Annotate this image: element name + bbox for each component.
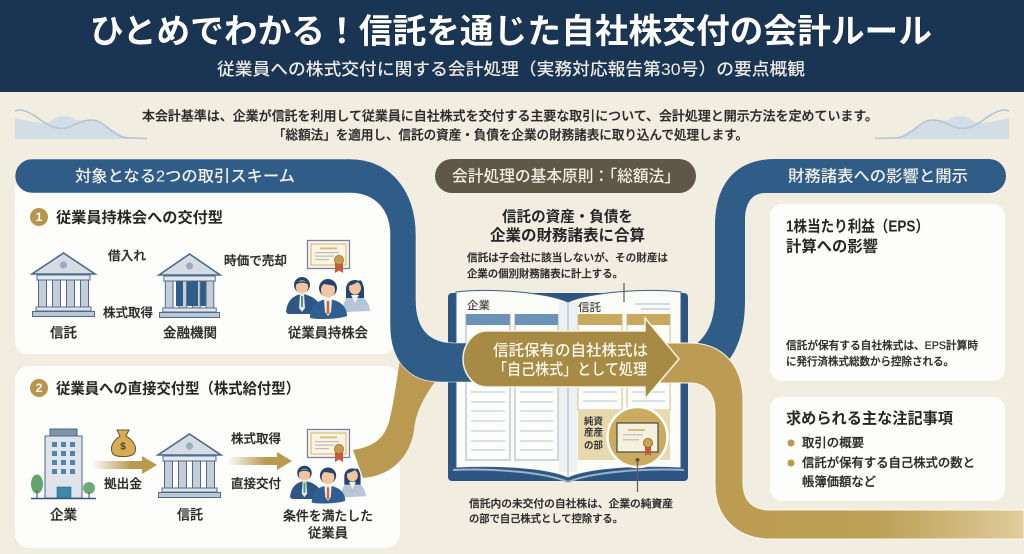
icon: open book: 信託 — [578, 300, 601, 314]
center principle text: 企業の財務諸表に合算 — [490, 226, 645, 244]
scheme 1 content — [30, 208, 370, 340]
icon: right hills — [875, 110, 1009, 139]
EPS card text: 1株当たり利益（EPS） — [786, 218, 929, 236]
icon: money bag: $ — [120, 442, 126, 452]
badge 2: 2 — [36, 381, 43, 395]
intro text: 本会計基準は、企業が信託を利用して従業員に自社株式を交付する主要な取引について、会計処理と開示方法を定めています。 — [142, 108, 878, 124]
badge 1 — [30, 208, 48, 226]
heading: disclosure: 財務諸表への影響と開示 — [788, 166, 968, 186]
center heading pill: 会計処理の基本原則：「総額法」 — [452, 168, 680, 186]
intro text: 「総額法」を適用し、信託の資産・負債を企業の財務諸表に取り込んで処理します。 — [273, 128, 748, 142]
panel: scheme 1 card — [15, 185, 395, 354]
leader line: bottom note — [636, 458, 640, 492]
header band — [0, 0, 1024, 92]
leader line: top note — [623, 283, 625, 302]
icon: left hills — [15, 110, 147, 139]
center principle text: 企業の個別財務諸表に計上する。 — [467, 267, 623, 280]
arrow: share delivery — [227, 452, 292, 470]
arrow: contribution — [92, 456, 157, 474]
heading: scheme 2: 従業員への直接交付型（株式給付型） — [56, 380, 300, 398]
labels — [50, 431, 373, 540]
icon: trust bank — [32, 253, 95, 316]
EPS card text — [786, 218, 978, 368]
arrow: treasury stock callout: 「自己株式」として処理 — [493, 360, 647, 378]
EPS card text: 計算への影響 — [786, 236, 878, 256]
intro text — [142, 108, 878, 142]
labels — [50, 249, 368, 340]
heading: scheme 1: 従業員持株会への交付型 — [56, 208, 223, 226]
icon: certificate — [308, 430, 350, 462]
icon: eligible employees — [290, 466, 366, 504]
panel: EPS card — [770, 204, 1005, 381]
labels: 拠出金 — [104, 476, 142, 491]
center principle text — [467, 208, 668, 280]
notes card text: 取引の概要 — [802, 436, 864, 450]
title: ひとめでわかる！信託を通じた自社株交付の会計ルール — [90, 13, 932, 51]
left gold ribbon — [353, 360, 440, 478]
notes card text: 信託が保有する自己株式の数と — [802, 455, 975, 470]
labels: 金融機関 — [163, 326, 217, 340]
labels: 従業員持株会 — [288, 326, 368, 340]
icon: open book: 産産 — [584, 426, 603, 438]
EPS card text: 信託が保有する自社株式は、EPS計算時 — [786, 338, 978, 352]
icon: certificate badge — [608, 407, 668, 467]
panel: notes card — [770, 397, 1005, 501]
arrow: treasury stock callout: 信託保有の自社株式は — [493, 342, 648, 360]
icon: open book: の部 — [584, 440, 603, 452]
icon: employees — [286, 277, 370, 319]
labels: 信託 — [50, 326, 77, 340]
panel: scheme 2 card — [15, 366, 400, 548]
center bottom note: 信託内の未交付の自社株は、企業の純資産 — [469, 497, 673, 510]
notes card text: 帳簿価額など — [802, 474, 876, 489]
icon: open book — [448, 290, 688, 482]
labels: 株式取得 — [103, 305, 153, 320]
left blue ribbon with heading — [15, 159, 490, 382]
subtitle: 従業員への株式交付に関する会計処理（実務対応報告第30号）の要点概観 — [217, 60, 805, 79]
center principle text: 信託は子会社に該当しないが、その財産は — [467, 251, 668, 264]
scheme 2 content — [30, 379, 373, 540]
icon: trust bank — [158, 434, 221, 498]
icon: open book: 企業 — [467, 298, 490, 312]
center bottom note — [469, 497, 673, 525]
labels: 従業員 — [308, 526, 348, 540]
center principle text: 信託の資産・負債を — [502, 208, 633, 226]
notes card text: 求められる主な注記事項 — [786, 408, 953, 428]
icon: certificate — [308, 240, 350, 273]
labels: 条件を満たした — [283, 508, 373, 524]
arrow: treasury stock callout — [463, 318, 679, 399]
notes card text — [786, 408, 975, 489]
icon: company building — [31, 429, 96, 498]
icon: money bag — [111, 430, 136, 456]
labels: 信託 — [177, 508, 203, 522]
right gold ribbon — [660, 343, 1024, 539]
center heading pill — [435, 159, 696, 193]
labels: 直接交付 — [231, 476, 281, 491]
labels: 時価で売却 — [224, 253, 287, 268]
badge 2 — [30, 379, 48, 397]
right blue ribbon with heading — [695, 159, 1006, 365]
labels: 株式取得 — [231, 431, 281, 446]
icon: financial institution — [159, 254, 220, 318]
center bottom note: の部で自己株式として控除する。 — [469, 512, 623, 525]
heading: schemes: 対象となる2つの取引スキーム — [75, 166, 295, 186]
EPS card text: に発行済株式総数から控除される。 — [786, 354, 954, 368]
labels: 借入れ — [108, 249, 146, 263]
badge 1: 1 — [36, 210, 43, 224]
labels: 企業 — [50, 508, 77, 522]
icon: open book: 純資 — [584, 416, 603, 428]
